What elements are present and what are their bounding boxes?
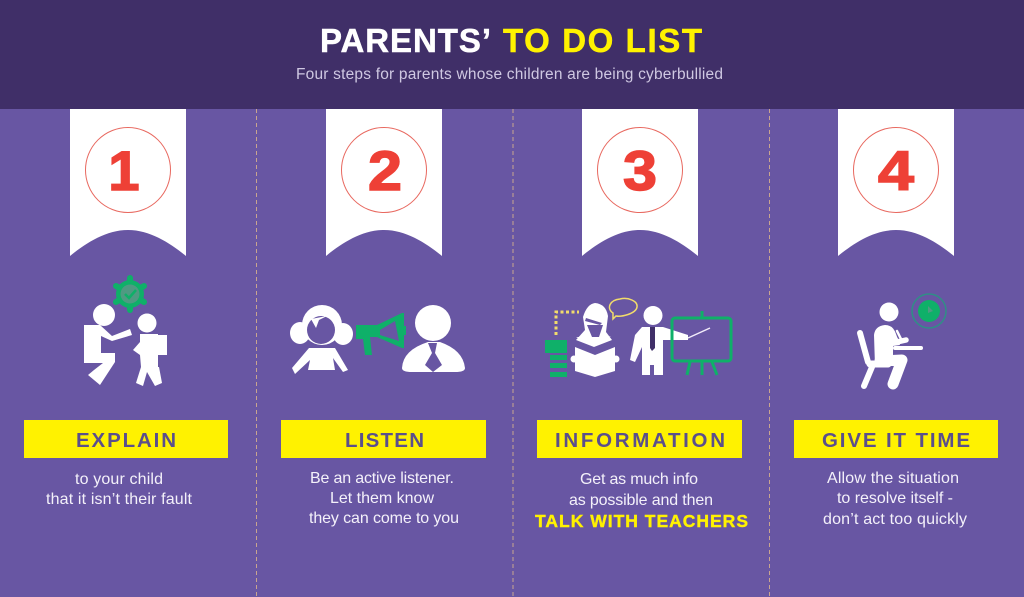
text: information body: as possible and then: [569, 492, 713, 509]
label: explain: [24, 420, 228, 458]
text: give it time body: don’t act too quickly: [823, 511, 967, 528]
text: listen body: [309, 470, 459, 527]
text: give it time body: [823, 470, 967, 528]
title: TO DO LIST: [503, 22, 702, 59]
subtitle: Four steps for parents whose children are being cyberbullied: [296, 66, 723, 83]
ribbon 4: [838, 109, 954, 256]
ribbon 1: 1: [108, 139, 140, 202]
label: information: INFORMATION: [555, 429, 725, 452]
panel: step 4 give it time: [794, 109, 998, 528]
text: information body: Get as much info: [580, 471, 698, 488]
ribbon 3: 3: [623, 139, 657, 202]
ribbon 2: [326, 109, 442, 256]
ribbon 4: 4: [878, 139, 914, 202]
text: information body: TALK WITH TEACHERS: [535, 511, 748, 531]
label: give it time: [794, 420, 998, 458]
label: explain: EXPLAIN: [76, 429, 176, 452]
ribbon 2: 2: [368, 139, 402, 202]
icon: girl, megaphone and adult: [290, 305, 465, 374]
text: listen body: Let them know: [330, 490, 434, 507]
panel: step 3 information: [535, 109, 748, 531]
text: listen body: they can come to you: [309, 510, 459, 527]
panel: step 1 explain: [24, 109, 228, 508]
label: listen: LISTEN: [345, 429, 424, 452]
text: explain body: that it isn’t their fault: [46, 491, 193, 508]
label: give it time: GIVE IT TIME: [822, 429, 970, 452]
text: information body: [535, 471, 748, 531]
label: information: [537, 420, 742, 458]
icon: seated figure with clock: [860, 294, 946, 386]
ribbon 1: [70, 109, 186, 256]
text: explain body: to your child: [75, 471, 163, 488]
title: PARENTS’: [320, 22, 491, 59]
text: give it time body: Allow the situation: [827, 470, 959, 487]
panel: step 2 listen: [281, 109, 486, 527]
text: listen body: Be an active listener.: [310, 470, 454, 487]
header band: [0, 0, 1024, 109]
text: give it time body: to resolve itself -: [837, 490, 953, 507]
title: [320, 22, 702, 59]
text: explain body: [46, 471, 193, 508]
icon: parent and child with gear: [84, 278, 167, 386]
icon: books, reader and teacher at board: [545, 298, 731, 377]
ribbon 3: [582, 109, 698, 256]
label: listen: [281, 420, 486, 458]
